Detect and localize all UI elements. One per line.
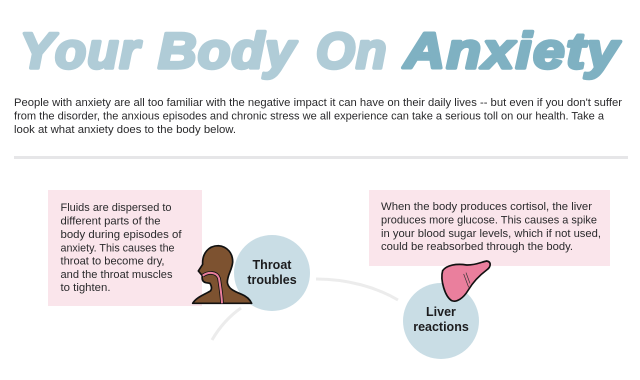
panel: liver text: could be reabsorbed through the body. — [381, 241, 573, 253]
panel: throat text — [48, 190, 202, 306]
panel: liver text: produces more glucose. This causes a spike — [381, 214, 597, 226]
circle: throat troubles: troubles — [247, 273, 297, 287]
panel: liver text: in your blood sugar levels, which if not used, — [381, 228, 601, 240]
title: Anxiety — [402, 24, 621, 79]
panel: throat text: throat to become dry, — [60, 256, 164, 268]
panel: throat text: and the throat muscles — [60, 269, 173, 281]
circle: throat troubles — [234, 235, 310, 311]
connector: throat to liver — [316, 279, 398, 300]
title — [20, 22, 621, 79]
circle: liver reactions — [403, 283, 479, 359]
intro text: from the disorder, the anxious episodes and chronic stress we all experience can take a serious toll on our health. Take a — [14, 110, 605, 122]
title: Body — [158, 22, 297, 78]
panel: throat text: Fluids are dispersed to — [60, 202, 172, 214]
panel: throat text: to tighten. — [60, 282, 110, 294]
panel: throat text: different parts of the — [60, 216, 160, 228]
title: On — [316, 23, 387, 79]
circle: liver reactions: Liver — [426, 305, 456, 319]
icon: head and throat — [193, 246, 252, 303]
panel: liver text: When the body produces cortisol, the liver — [381, 201, 592, 213]
title: Your — [20, 22, 142, 79]
intro text: People with anxiety are all too familiar with the negative impact it can have on their daily lives -- but even if you don't suffer — [14, 97, 622, 109]
connector: throat downward — [212, 308, 241, 340]
intro text — [14, 97, 622, 136]
icon: liver — [442, 261, 490, 301]
panel: liver text — [369, 190, 610, 266]
circle: liver reactions: reactions — [413, 320, 469, 334]
panel: throat text: body during episodes of — [60, 229, 182, 241]
intro text: look at what anxiety does to the body below. — [14, 124, 236, 136]
circle: throat troubles: Throat — [253, 258, 292, 272]
panel: throat text: anxiety. This causes the — [60, 242, 174, 254]
